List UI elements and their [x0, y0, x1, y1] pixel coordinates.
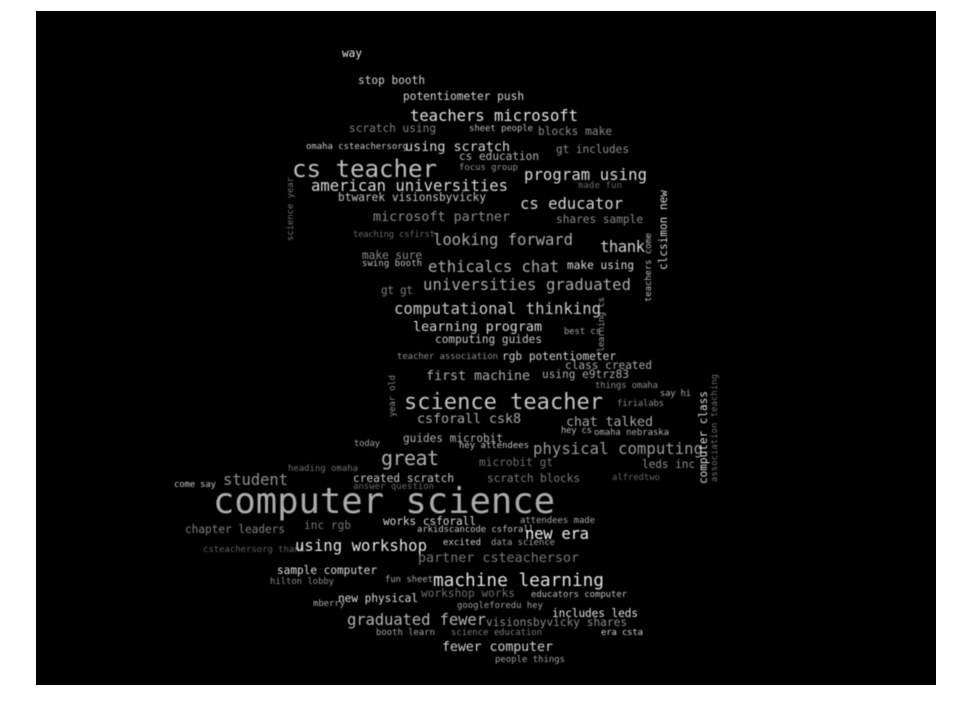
word cloud: new physical	[338, 592, 418, 605]
word cloud: microbit gt	[479, 456, 553, 469]
word cloud: ethicalcs chat	[428, 258, 559, 276]
word cloud: hilton lobby	[270, 577, 334, 587]
word cloud: science teacher	[404, 390, 603, 415]
word cloud: includes leds	[552, 607, 638, 620]
word cloud: hey attendees	[459, 441, 529, 451]
word cloud: arkidscancode csforall	[417, 525, 534, 535]
word cloud: visionsbyvicky shares	[486, 616, 627, 629]
word cloud: answer question	[353, 482, 434, 492]
word cloud: today	[354, 439, 380, 449]
word cloud: using workshop	[295, 537, 427, 555]
word cloud: computational thinking	[394, 300, 601, 318]
word cloud: shares sample	[556, 213, 643, 226]
word cloud: attendees made	[520, 516, 595, 526]
word cloud: science year	[286, 177, 296, 241]
word cloud: mberry	[313, 599, 345, 609]
word cloud: computer science	[213, 481, 555, 522]
word cloud: universities graduated	[423, 276, 631, 294]
word cloud: made fun	[578, 181, 622, 191]
word cloud: csforall csk8	[417, 412, 521, 427]
word cloud: association teaching	[710, 374, 720, 482]
word cloud: using e9trz83	[542, 368, 629, 381]
word cloud: works csforall	[383, 515, 476, 528]
word cloud: learning cs	[597, 297, 607, 352]
word cloud: scratch using	[349, 122, 436, 135]
word cloud: looking forward	[433, 231, 573, 249]
word cloud: machine learning	[433, 570, 604, 591]
word cloud: scratch blocks	[487, 472, 580, 485]
word cloud: thank	[600, 238, 646, 256]
word cloud: best cs	[564, 327, 601, 337]
word cloud: computing guides	[435, 333, 542, 346]
word cloud: things omaha	[595, 381, 658, 391]
word cloud: btwarek visionsbyvicky	[338, 191, 486, 204]
word cloud: educators computer	[531, 590, 627, 600]
word cloud: people things	[495, 655, 565, 665]
word cloud: computer class	[697, 391, 710, 484]
word cloud: excited	[443, 538, 481, 548]
word cloud: graduated fewer	[347, 611, 486, 629]
word cloud: student	[223, 471, 288, 489]
word cloud: googleforedu hey	[457, 601, 543, 611]
word cloud: using scratch	[405, 140, 510, 155]
word cloud: teacher association	[397, 352, 498, 362]
word cloud: data science	[491, 538, 555, 548]
word cloud: way	[342, 47, 362, 60]
word cloud: physical computing	[533, 440, 703, 458]
word cloud: chat talked	[566, 415, 653, 430]
word cloud: partner csteachersor	[418, 551, 579, 566]
word cloud: cs teacher	[292, 155, 437, 183]
word cloud: clcsimon new	[657, 190, 670, 270]
word cloud: microsoft partner	[373, 210, 510, 225]
word cloud: science education	[451, 628, 542, 638]
word cloud: come say	[174, 480, 216, 490]
word cloud: cs education	[459, 150, 539, 163]
word cloud: omaha csteachersorg	[306, 142, 408, 152]
word cloud	[174, 47, 720, 665]
word cloud: firialabs	[617, 399, 664, 409]
word cloud: blocks make	[538, 125, 612, 138]
word cloud: year old	[388, 375, 398, 417]
word cloud: make using	[567, 259, 634, 272]
word cloud: fun sheet	[385, 575, 433, 585]
word cloud: class created	[565, 359, 652, 372]
word cloud: sheet people	[469, 124, 533, 134]
word cloud: teachers microsoft	[410, 107, 578, 125]
word cloud: heading omaha	[288, 464, 358, 474]
word cloud: potentiometer push	[403, 90, 524, 103]
word cloud: new era	[525, 525, 589, 543]
word cloud: omaha nebraska	[594, 428, 669, 438]
word cloud: alfredtwo	[612, 473, 660, 483]
word cloud: stop booth	[358, 74, 425, 87]
word cloud: teaching csfirst	[353, 230, 435, 240]
word cloud: make sure	[362, 249, 422, 262]
word cloud: program using	[524, 166, 647, 184]
word cloud: focus group	[459, 163, 518, 173]
word cloud: teachers come	[644, 233, 654, 302]
word cloud: booth learn	[376, 628, 435, 638]
word cloud: sample computer	[277, 564, 377, 577]
word cloud: first machine	[426, 369, 530, 384]
word cloud: learning program	[413, 320, 542, 335]
word cloud: chapter leaders	[185, 523, 285, 536]
word cloud: cs educator	[520, 195, 623, 213]
word cloud: workshop works	[421, 587, 515, 600]
word cloud: era csta	[601, 628, 643, 638]
word cloud: fewer computer	[442, 640, 553, 655]
word cloud: say hi	[660, 389, 691, 399]
word cloud: gt includes	[556, 143, 629, 156]
word cloud: great	[381, 446, 439, 470]
word cloud: guides microbit	[403, 432, 503, 445]
word cloud: gt gt	[381, 284, 413, 297]
word cloud: csteachersorg thank	[203, 545, 306, 555]
word cloud: created scratch	[353, 472, 454, 485]
word cloud: swing booth	[362, 259, 422, 269]
word cloud: leds inc	[642, 458, 695, 471]
word cloud: rgb potentiometer	[502, 350, 616, 363]
word cloud: inc rgb	[304, 519, 351, 532]
word cloud: hey cs	[561, 426, 592, 436]
word cloud: american universities	[311, 177, 508, 195]
